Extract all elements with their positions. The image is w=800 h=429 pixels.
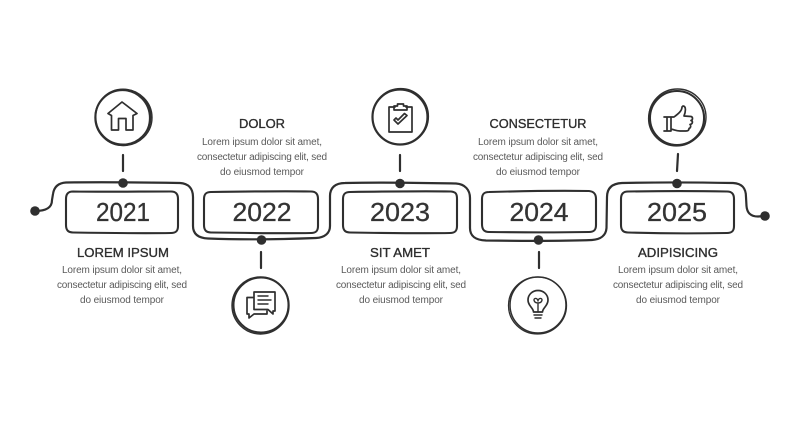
connector tick (677, 154, 678, 171)
heading and text: Consectetur: Lorem ipsum dolor sit amet, (478, 137, 598, 148)
connector dot (395, 179, 405, 188)
heading and text: Dolor (197, 116, 327, 178)
step 2024 (473, 116, 603, 334)
step 2022 (197, 116, 327, 334)
heading and text: Dolor: Lorem ipsum dolor sit amet, (202, 137, 322, 148)
connector tick (260, 252, 262, 268)
heading and text: Lorem Ipsum: do eiusmod tempor (80, 295, 165, 306)
heading and text: Lorem Ipsum (57, 245, 187, 306)
step 2021 (57, 90, 187, 306)
icon: house (108, 102, 137, 130)
heading and text: Lorem Ipsum: Lorem ipsum dolor sit amet, (62, 265, 182, 276)
icon circle: chat (232, 277, 289, 334)
heading and text: Consectetur: do eiusmod tempor (496, 167, 581, 178)
year 2024: 2024 (510, 197, 568, 227)
icon circle: light bulb (508, 277, 566, 334)
year 2022: 2022 (232, 197, 292, 227)
step 2025 (613, 89, 743, 306)
icon: speech bubbles (247, 298, 267, 318)
year box 2021 (66, 192, 178, 233)
heading and text: Sit Amet (336, 245, 466, 306)
connector dot (534, 235, 543, 245)
heading and text: Adipisicing: consectetur adipiscing elit, sed (613, 280, 743, 291)
end dot (760, 211, 770, 221)
icon circle: thumbs up (648, 89, 706, 146)
heading and text: Adipisicing: Lorem ipsum dolor sit amet, (618, 265, 738, 276)
icon circle: clipboard (372, 88, 428, 144)
connector tick (399, 155, 401, 171)
heading and text: Dolor: DOLOR (239, 116, 285, 131)
icon circle: home (95, 90, 152, 146)
icon: clipboard with check (389, 107, 412, 132)
icon: thumbs up (664, 106, 692, 131)
connector dot (672, 179, 682, 188)
heading and text: Consectetur (473, 116, 603, 178)
heading and text: Consectetur: consectetur adipiscing elit, sed (473, 152, 603, 163)
year box 2025 (621, 191, 734, 233)
heading and text: Adipisicing: do eiusmod tempor (636, 295, 721, 306)
step 2023 (336, 88, 466, 306)
heading and text: Dolor: do eiusmod tempor (220, 167, 305, 178)
heading and text: Sit Amet: consectetur adipiscing elit, sed (336, 280, 466, 291)
connector tick (538, 252, 540, 268)
timeline connector line (35, 182, 765, 241)
icon: light bulb (528, 290, 548, 312)
heading and text: Sit Amet: SIT AMET (370, 245, 430, 260)
year box 2022 (204, 191, 318, 233)
year 2021: 2021 (96, 197, 150, 227)
year 2025: 2025 (647, 197, 707, 227)
heading and text: Lorem Ipsum: consectetur adipiscing elit, sed (57, 280, 187, 291)
heading and text: Adipisicing: ADIPISICING (638, 245, 718, 260)
year box 2023 (343, 191, 457, 233)
connector dot (257, 235, 266, 245)
heading and text: Dolor: consectetur adipiscing elit, sed (197, 152, 327, 163)
heading and text: Adipisicing (613, 245, 743, 306)
start dot (30, 206, 40, 216)
heading and text: Lorem Ipsum: LOREM IPSUM (77, 245, 169, 260)
year box 2024 (482, 191, 596, 232)
connector tick (122, 155, 124, 171)
connector dot (118, 178, 128, 188)
heading and text: Consectetur: CONSECTETUR (490, 116, 586, 131)
heading and text: Sit Amet: Lorem ipsum dolor sit amet, (341, 265, 461, 276)
year 2023: 2023 (370, 197, 430, 227)
heading and text: Sit Amet: do eiusmod tempor (359, 295, 444, 306)
